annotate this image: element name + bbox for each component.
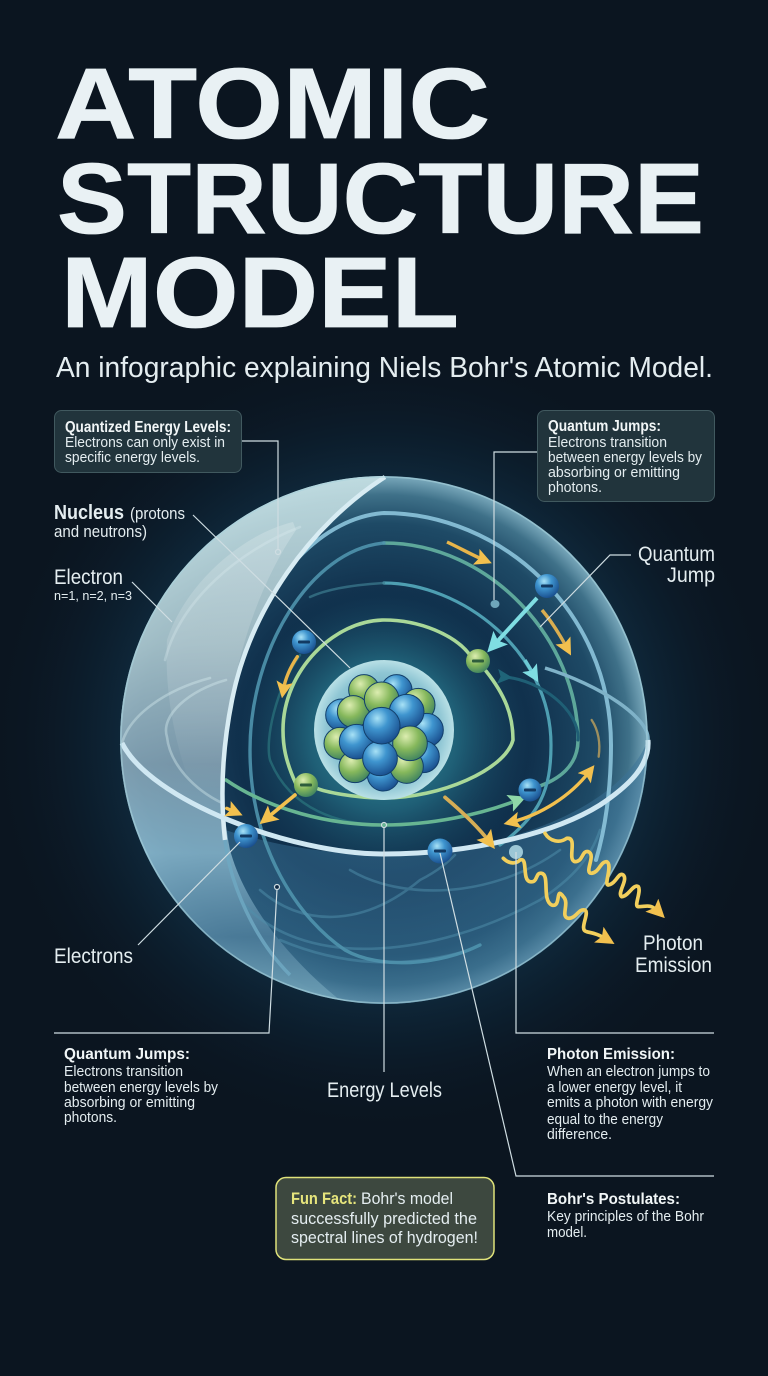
ring left light blue	[250, 543, 480, 963]
callout: quantized energy levels: specific energy levels.	[65, 449, 200, 466]
callout: quantum jumps top: Electrons transition	[548, 434, 667, 451]
label: photon emission: Photon	[643, 932, 703, 955]
cut edge of the sphere	[222, 477, 385, 840]
callout: quantum jumps top: absorbing or emitting	[548, 464, 680, 481]
arrow: double headed	[512, 772, 589, 822]
title: ATOMIC	[55, 48, 490, 160]
arrow: cyan quantum jump	[494, 598, 537, 645]
callout: fun fact: spectral lines of hydrogen!	[291, 1229, 478, 1247]
title: STRUCTURE	[57, 143, 704, 255]
text block: bohr's postulates: Bohr's Postulates:	[547, 1191, 680, 1208]
leader: energy levels	[382, 822, 386, 1072]
faint ring left	[310, 583, 384, 597]
orbit rings	[122, 513, 611, 963]
leader: bohr's postulates	[440, 853, 714, 1176]
text block: quantum jumps bottom: absorbing or emitting	[64, 1094, 195, 1111]
text block: bohr's postulates: Key principles of the Bohr	[547, 1208, 704, 1225]
electron: upper left	[292, 630, 316, 654]
leader lines	[54, 441, 714, 1176]
label: electrons: Electrons	[54, 945, 133, 968]
wave: photon 2	[545, 833, 658, 912]
glass crescent on the left	[120, 476, 385, 1000]
callout: quantized energy levels: Quantized Energy Levels:	[65, 419, 231, 436]
leader: quantum jumps bottom	[54, 884, 280, 1033]
mid ellipse green	[226, 780, 518, 825]
lower faint arcs	[240, 830, 600, 962]
callout: quantum jumps top: between energy levels by	[548, 449, 702, 466]
label: nucleus: and neutrons)	[54, 523, 147, 541]
label: photon emission	[635, 932, 712, 977]
sphere body	[120, 476, 648, 1004]
text block: bohr's postulates: model.	[547, 1224, 587, 1241]
callout: quantized energy levels: Electrons can only exist in	[65, 434, 225, 451]
glass highlight	[167, 522, 296, 790]
electrons	[234, 574, 559, 864]
text block: photon emission: a lower energy level, it	[547, 1079, 683, 1096]
arrow: top yellow	[447, 542, 484, 560]
leader: nucleus	[193, 515, 350, 668]
cut edge lower	[225, 840, 290, 975]
arrow: teal ring head	[525, 660, 534, 675]
nucleus	[314, 660, 454, 800]
callout: quantum jumps top	[538, 410, 714, 502]
leader: quantum jumps top	[490, 452, 537, 608]
text block: photon emission	[547, 1046, 713, 1143]
arc faint yellow	[592, 720, 599, 757]
electron: blue right	[518, 778, 542, 802]
arrows and waves	[227, 657, 658, 939]
atom sphere diagram	[120, 476, 658, 1004]
ring green top	[384, 543, 578, 788]
wave: photon 1	[503, 858, 607, 939]
label: nucleus: (protons	[130, 505, 185, 523]
nucleus glow	[234, 585, 534, 885]
label: electron: Electron	[54, 566, 123, 589]
arrow: lower left short	[227, 808, 235, 812]
title	[55, 48, 704, 349]
text block: quantum jumps bottom: Quantum Jumps:	[64, 1046, 190, 1063]
text block: photon emission: When an electron jumps to	[547, 1063, 710, 1080]
label: quantum jump: Jump	[667, 564, 715, 587]
callout: fun fact: Bohr's model	[361, 1190, 453, 1208]
text block: photon emission: Photon Emission:	[547, 1046, 675, 1063]
electron: green upper	[466, 649, 490, 673]
equator band	[122, 740, 648, 854]
electron: on equator left	[234, 824, 258, 848]
text block: quantum jumps bottom	[64, 1046, 218, 1126]
text block: quantum jumps bottom: photons.	[64, 1109, 117, 1126]
glass back ellipse arcs	[122, 678, 226, 803]
callout: quantum jumps top: Quantum Jumps:	[548, 418, 661, 435]
callout: quantized energy levels	[54, 410, 242, 472]
lower hemisphere	[225, 740, 648, 1004]
arrow: green electron to blue electron	[267, 795, 295, 818]
arrow: left yellow	[283, 657, 297, 690]
ring teal	[384, 583, 551, 845]
text block: quantum jumps bottom: Electrons transition	[64, 1063, 183, 1080]
label: energy levels: Energy Levels	[327, 1079, 442, 1102]
equator back arc	[545, 668, 648, 740]
background glow	[0, 340, 768, 1140]
label: nucleus: Nucleus	[54, 502, 124, 524]
callout: fun fact: Fun Fact:	[291, 1190, 357, 1208]
subtitle: An infographic explaining Niels Bohr's Atomic Model.	[56, 352, 713, 384]
text block: photon emission: difference.	[547, 1126, 612, 1143]
electron: faded photon source	[509, 845, 523, 859]
text block: bohr's postulates	[547, 1191, 704, 1241]
leader: photon emission	[516, 852, 714, 1033]
electron: green lower left	[294, 773, 318, 797]
inner green ring	[283, 620, 513, 798]
callout: fun fact	[276, 1178, 494, 1260]
nucleus particles	[324, 675, 443, 791]
leader: quantized energy levels	[241, 441, 280, 554]
label: nucleus	[54, 502, 185, 541]
outer ring light blue	[298, 513, 611, 860]
text block: quantum jumps bottom: between energy levels by	[64, 1079, 218, 1096]
label: quantum jump: Quantum	[638, 543, 715, 566]
callout: fun fact: successfully predicted the	[291, 1210, 477, 1228]
rim highlight	[121, 477, 647, 1003]
faint back orbit	[505, 677, 578, 740]
electron: blue upper right	[535, 574, 559, 598]
nucleus shell	[314, 660, 454, 800]
leader: electrons	[138, 842, 240, 945]
arrow: right yellow	[542, 610, 567, 648]
leader: electron	[132, 582, 172, 622]
label: electron: n=1, n=2, n=3	[54, 588, 132, 603]
arrow: nucleus down to photon	[445, 797, 489, 842]
electron: on equator center	[428, 838, 452, 864]
title: MODEL	[61, 237, 459, 349]
callout: quantum jumps top: photons.	[548, 479, 602, 496]
label: photon emission: Emission	[635, 954, 712, 977]
text block: photon emission: equal to the energy	[547, 1111, 663, 1128]
text block: photon emission: emits a photon with energy	[547, 1094, 713, 1111]
label: quantum jump	[638, 543, 715, 587]
label: electron	[54, 566, 132, 603]
leader: quantum jump label	[540, 555, 631, 627]
